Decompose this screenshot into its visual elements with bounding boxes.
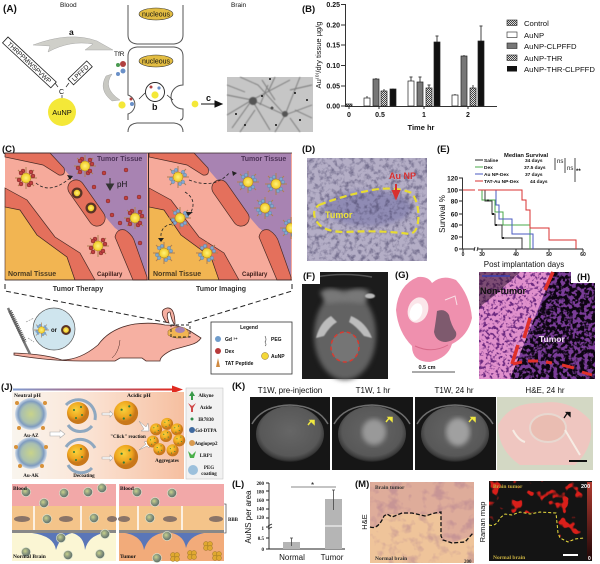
error bars <box>367 26 482 98</box>
panel D: histology with tumor outline <box>302 144 427 261</box>
panel H: tumor boundary histology <box>479 272 595 379</box>
survival legend: 34 days <box>525 158 543 164</box>
L axes <box>244 482 345 562</box>
legend box: TAT Peptide <box>225 361 254 367</box>
panel J: click aggregation and BBB <box>1 382 239 563</box>
panel B: bar chart <box>302 2 595 132</box>
AuNP conjugate with peptides <box>2 37 93 126</box>
L axes: 0.5 <box>258 537 264 542</box>
K titles <box>258 386 565 395</box>
MRI pre-injection <box>250 397 330 470</box>
y axis: 0 <box>347 112 351 119</box>
y axis: Time hr <box>408 123 435 132</box>
y axis: 0.00 <box>326 104 340 110</box>
L axes: Normal <box>279 553 305 562</box>
K titles: T1W, 24 hr <box>434 386 474 395</box>
L axes: 0 <box>262 548 264 553</box>
upper scheme: Aggregates <box>155 459 179 464</box>
legend box: Legend <box>240 325 258 331</box>
legend <box>507 19 595 74</box>
y axis: 0.20 <box>326 22 340 30</box>
stained brain section <box>396 277 472 362</box>
L axes: Tumor <box>321 553 344 562</box>
legend box: Dex <box>225 349 234 355</box>
legend J: PEG <box>204 466 214 471</box>
y axis: 0.15 <box>326 42 340 50</box>
survival axes <box>438 176 586 269</box>
significance marker: * <box>311 481 314 490</box>
panel label H: (H) <box>577 272 590 283</box>
panel label J: (J) <box>1 382 13 393</box>
survival axes: 30 <box>479 252 485 258</box>
BBB normal brain scene: Normal Brain <box>13 554 46 560</box>
mouse illustration <box>14 308 201 361</box>
panel label L: (L) <box>232 479 244 490</box>
MRI 1 hr <box>332 397 413 470</box>
endothelial cell walls <box>128 5 183 132</box>
legend J: Gd-DTPA <box>195 429 217 434</box>
legend: AuNP-THR-CLPFFD <box>524 65 595 74</box>
left scene: tumor therapy: Normal Tissue <box>8 271 56 278</box>
syringe and nanoparticle inset <box>8 308 75 354</box>
BBB bracket and label: BBB <box>228 518 239 523</box>
survival axes: 60 <box>451 212 458 218</box>
panel E: survival curve <box>437 144 586 269</box>
panel label A: (A) <box>3 4 17 15</box>
legend J: Alkyne <box>198 394 214 399</box>
survival legend: ns <box>567 166 573 172</box>
legend J <box>186 388 223 479</box>
Raman map image: Normal brain <box>493 555 525 561</box>
y axis: 0.10 <box>326 63 340 70</box>
panel K: MRI time series and histology <box>232 381 593 470</box>
panel C: tumor therapy and imaging <box>2 144 306 374</box>
L bars <box>283 490 342 549</box>
legend box: Gd ³⁺ <box>225 337 238 343</box>
nucleus ellipses: nucleous <box>142 58 171 66</box>
survival axes: 0 <box>462 252 465 258</box>
survival markers <box>487 200 504 239</box>
panel G: stained brain section <box>395 270 472 372</box>
BBB tumor scene: Tumor <box>120 554 137 560</box>
AuNP conjugate with peptides: THRPPMWSPVWP <box>6 41 52 85</box>
Raman map image: 0 <box>588 556 591 562</box>
survival axes: 20 <box>451 234 458 242</box>
H&E section <box>497 397 593 470</box>
panel label E: (E) <box>437 144 450 155</box>
survival axes: 80 <box>451 198 458 206</box>
vesicle b: b <box>152 102 158 112</box>
pH gradient arrow <box>13 386 183 394</box>
nucleus ellipses: nucleous <box>142 12 171 18</box>
upper scheme: Au-AK <box>23 474 39 479</box>
H&E image M: Normal brain <box>375 556 407 562</box>
legend: AuNP-CLPFFD <box>524 42 577 51</box>
legend J: LRP1 <box>200 454 213 459</box>
K titles: T1W, pre-injection <box>258 386 322 395</box>
upper scheme: Neutral pH <box>14 393 41 399</box>
L axes: 180 <box>256 490 264 496</box>
survival axes: 40 <box>451 222 458 230</box>
K titles: T1W, 1 hr <box>356 386 391 395</box>
right scene: tumor imaging: Capillary <box>242 272 268 278</box>
upper scheme: Acidic pH <box>127 393 151 399</box>
survival legend: ** <box>576 169 581 175</box>
AuNP conjugate with peptides: C <box>59 89 64 96</box>
survival legend: Saline <box>484 158 498 164</box>
L axes: 160 <box>256 499 264 504</box>
Raman map image <box>489 481 592 562</box>
y axis: 1 <box>422 112 426 119</box>
legend J: coating <box>201 472 217 477</box>
legend box: PEG <box>271 337 282 343</box>
survival axes: 0 <box>454 246 458 254</box>
left scene: tumor therapy: Capillary <box>97 272 123 278</box>
H&E side label: H&E <box>360 514 369 530</box>
K titles: H&E, 24 hr <box>525 386 565 395</box>
panel label K: (K) <box>232 381 245 392</box>
BBB tumor scene: Blood <box>120 486 134 492</box>
micrograph: neuron network <box>227 77 313 132</box>
Raman map image: Brain tumor <box>493 484 523 490</box>
panel label C: (C) <box>2 144 15 155</box>
BBB normal brain scene: Blood <box>13 486 27 492</box>
survival axes: Survival % <box>438 195 447 233</box>
legend: AuNP <box>524 31 544 40</box>
upper scheme: Au-AZ <box>23 434 39 439</box>
left scene: tumor therapy: pH <box>117 180 127 189</box>
survival legend: ns <box>557 159 563 165</box>
y axis: 2 <box>466 112 470 119</box>
legend J: Azide <box>200 406 213 411</box>
y axis <box>314 2 497 132</box>
panel label D: (D) <box>302 144 315 155</box>
left scene: tumor therapy: Tumor Tissue <box>97 156 142 163</box>
L axes: 120 <box>256 516 264 521</box>
legend: Control <box>524 19 549 28</box>
y axis: 0.25 <box>326 2 340 9</box>
TfR receptor and curved arrow <box>103 51 134 109</box>
survival legend: TAT-Au NP-Dex <box>484 179 519 185</box>
bars <box>346 41 484 106</box>
right scene: tumor imaging <box>148 153 306 280</box>
BBB tumor scene <box>118 484 224 563</box>
panel F: MRI <box>302 271 388 380</box>
survival curves <box>463 190 576 249</box>
survival legend: Dex <box>484 165 493 171</box>
micrograph D: Tumor <box>325 210 353 220</box>
MRI image <box>302 272 388 380</box>
L axes: 140 <box>256 508 264 512</box>
AuNP conjugate with peptides: LPFFD <box>71 64 91 83</box>
micrograph D <box>307 158 427 261</box>
legend J: Angiopep2 <box>194 442 218 447</box>
panel label B: (B) <box>302 4 315 15</box>
survival axes: 40 <box>513 252 519 258</box>
upper scheme <box>12 392 185 479</box>
MRI 24 hr <box>415 397 496 470</box>
H&E image M: Brain tumor <box>375 485 405 491</box>
AuNP conjugate with peptides: AuNP <box>52 108 72 117</box>
left scene: tumor therapy <box>5 153 148 280</box>
Raman map image: 200 <box>581 484 590 490</box>
L axes: 200 <box>256 482 264 487</box>
heading: Brain: Brain <box>231 2 247 9</box>
arrow c <box>192 93 222 107</box>
panel label G: (G) <box>395 270 409 281</box>
survival axes: 50 <box>546 252 552 258</box>
panel L: AuNS per area bar chart <box>232 479 345 562</box>
TfR receptor and curved arrow: TfR <box>114 51 125 58</box>
arrow c: c <box>206 93 211 103</box>
survival legend: 37.5 days <box>524 165 546 171</box>
survival legend: Au NP-Dex <box>484 172 509 178</box>
right scene: tumor imaging: Normal Tissue <box>153 271 201 278</box>
scale label: 0.5 cm <box>418 365 436 371</box>
histology image H: Non-tumor <box>480 286 526 296</box>
y axis: 0.05 <box>326 84 340 90</box>
survival legend: 44 days <box>530 179 548 185</box>
panel M: H&E and Raman map <box>355 479 592 564</box>
L axes: 1 <box>262 527 264 532</box>
upper scheme: Decoating <box>73 474 95 479</box>
vesicle b <box>139 82 173 112</box>
BBB bracket and label <box>224 504 239 533</box>
BBB normal brain scene <box>12 483 117 561</box>
survival legend <box>475 153 581 185</box>
y axis: Au⁽⁰⁾/dry tissue µg/g <box>314 22 323 88</box>
legend box <box>211 322 292 374</box>
survival legend: 37 days <box>525 172 543 178</box>
zoom dashed lines <box>5 284 292 323</box>
legend J: IR7830 <box>198 418 214 423</box>
arrow a: a <box>69 27 74 37</box>
micrograph D: Au NP <box>389 171 416 181</box>
survival legend: Median Survival <box>504 153 549 159</box>
syringe and nanoparticle inset: or <box>51 328 58 334</box>
survival axes: 100 <box>447 188 458 194</box>
histology image H: Tumor <box>539 334 566 344</box>
caption: Tumor Imaging: Tumor Imaging <box>196 286 246 293</box>
y axis: 0.5 <box>375 112 385 119</box>
panel label M: (M) <box>355 479 369 490</box>
panel label F: (F) <box>303 271 315 282</box>
Raman side label: Raman map <box>478 502 487 542</box>
H&E image M <box>370 482 474 564</box>
survival axes: 120 <box>447 176 458 182</box>
survival axes: 60 <box>580 252 586 258</box>
right scene: tumor imaging: Tumor Tissue <box>241 156 286 163</box>
legend: AuNP-THR <box>524 54 563 63</box>
histology image H <box>479 272 595 379</box>
upper scheme: "Click" reaction <box>110 435 146 440</box>
legend box: AuNP <box>271 354 285 360</box>
heading: Blood: Blood <box>60 2 77 9</box>
nucleus ellipses <box>139 8 173 67</box>
L axes: AuNS per area <box>244 490 253 543</box>
survival axes: Post implantation days <box>484 260 564 269</box>
caption: Tumor Therapy: Tumor Therapy <box>53 286 103 293</box>
panel A: transcytosis schematic <box>2 2 313 132</box>
arrow a <box>33 27 113 52</box>
